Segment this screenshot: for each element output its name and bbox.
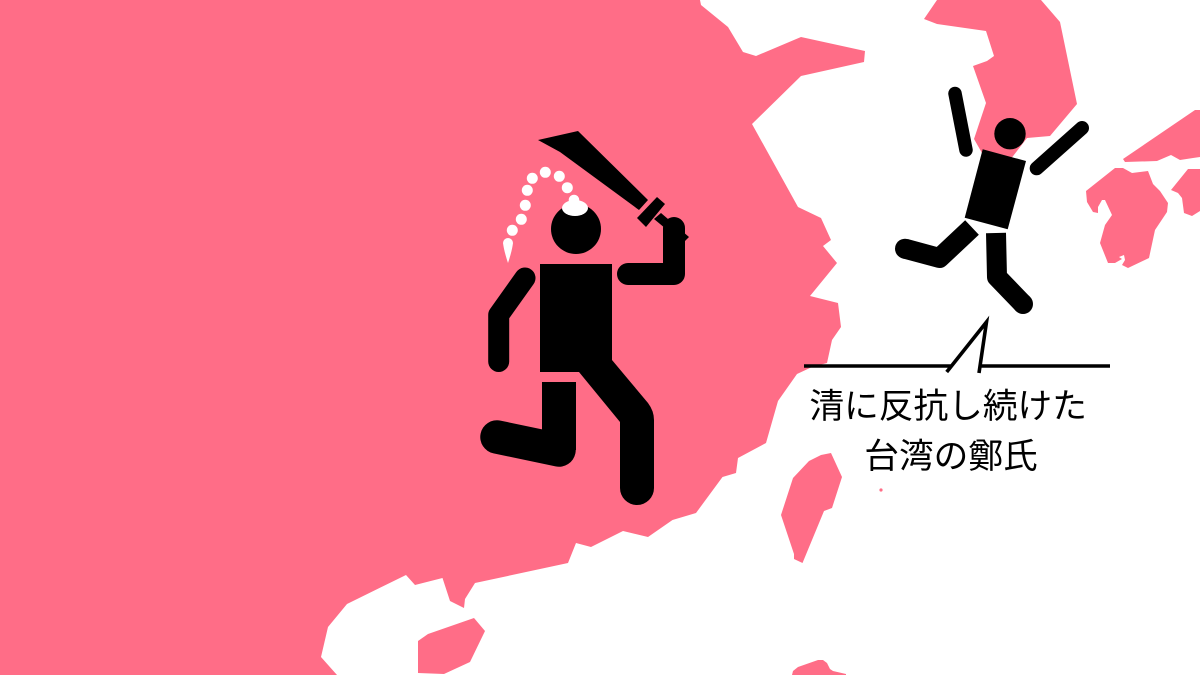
- left arm: [955, 94, 966, 150]
- Honshu: [1123, 110, 1200, 162]
- mainland China: [0, 0, 865, 675]
- head: [994, 118, 1026, 149]
- speech callout line: [804, 322, 1110, 373]
- front leg: [579, 360, 654, 505]
- Qing soldier figure with sword and queue: [497, 131, 689, 505]
- front foot: [1013, 294, 1033, 314]
- queue hair: [503, 167, 588, 263]
- Korean peninsula: [924, 0, 1077, 160]
- back thigh: [542, 382, 576, 450]
- Kyushu: [1086, 168, 1168, 268]
- Luzon tip: [792, 660, 846, 675]
- back shin: [497, 437, 559, 450]
- torso: [540, 264, 612, 372]
- Zheng clan figure leaping: [895, 94, 1082, 314]
- back leg path: [905, 228, 972, 258]
- front leg path: [996, 233, 1023, 304]
- sword: [538, 131, 689, 243]
- guard: [637, 197, 665, 227]
- callout text: 清に反抗し続けた: [809, 387, 1087, 426]
- raised arm: [628, 228, 674, 274]
- blade: [538, 131, 648, 210]
- handle: [654, 213, 689, 243]
- small islet: [879, 488, 883, 492]
- back leg: [895, 228, 972, 259]
- back leg: [497, 382, 576, 450]
- callout text: 台湾の鄭氏: [864, 437, 1038, 476]
- head: [551, 204, 601, 254]
- front leg: [996, 233, 1033, 314]
- back foot: [895, 239, 915, 259]
- Hainan: [418, 618, 485, 674]
- Taiwan: [781, 453, 842, 563]
- torso: [965, 149, 1026, 229]
- shaved-head topknot: [562, 200, 588, 216]
- Shikoku: [1171, 169, 1200, 216]
- lowered arm: [499, 278, 525, 362]
- right arm: [1037, 128, 1082, 168]
